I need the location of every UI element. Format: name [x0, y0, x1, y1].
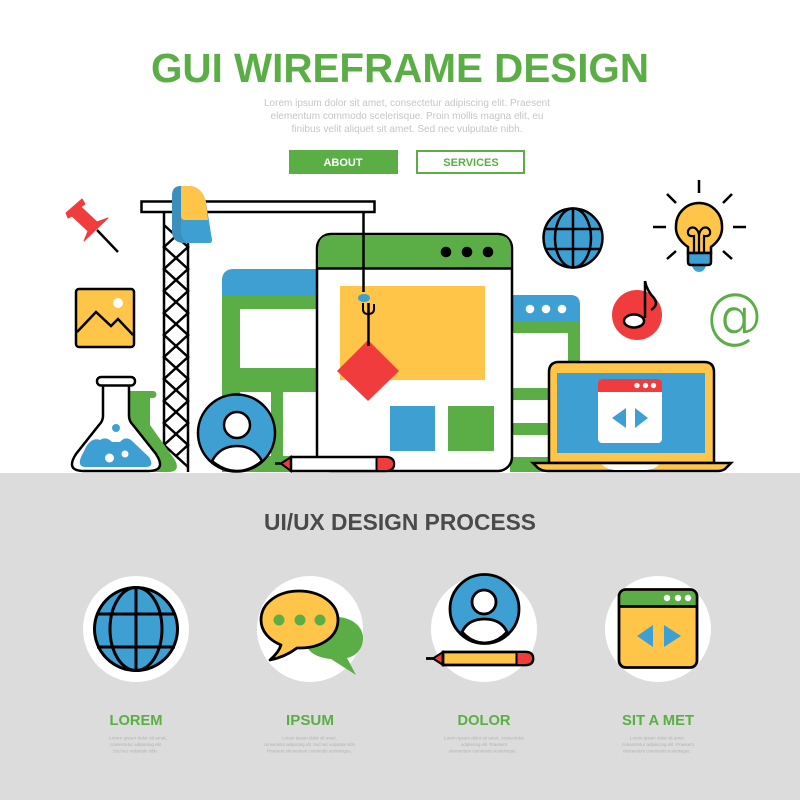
- caption: sit a met: [622, 736, 695, 754]
- intro paragraph: elementum commodo scelerisque. Proin mollis magna elit, eu: [270, 110, 544, 122]
- crane jib: [142, 202, 374, 212]
- icon: music note: [612, 281, 662, 340]
- caption: sit a met: consectetur adipiscing elit. Praesent: [622, 742, 695, 748]
- button: services: [417, 151, 524, 173]
- button: about: [289, 150, 398, 174]
- caption: lorem: consectetur adipiscing elit.: [110, 742, 162, 748]
- caption: lorem: [109, 736, 167, 754]
- caption: lorem: Sed nec vulputate nibh.: [113, 748, 158, 754]
- caption: sit a met: elementum commodo scelerisque.: [623, 748, 691, 754]
- caption: dolor: adipiscing elit. Praesent: [461, 742, 508, 748]
- step 2: ipsum: [257, 576, 363, 754]
- icon: green flask behind: [130, 391, 177, 472]
- icon: image: [76, 289, 134, 347]
- icon: chat bubbles: [257, 576, 363, 682]
- back window left: [222, 269, 320, 472]
- crane hook with red diamond: [337, 212, 399, 401]
- caption: ipsum: Lorem ipsum dolor sit amet,: [282, 736, 337, 742]
- button: about: ABOUT: [323, 157, 363, 169]
- caption: lorem: Lorem ipsum dolor sit amet,: [109, 736, 167, 742]
- icon: at sign: @: [706, 278, 763, 352]
- label: dolor: DOLOR: [458, 712, 511, 729]
- button: services: SERVICES: [443, 157, 499, 169]
- icon: pencil: [275, 457, 394, 471]
- caption: ipsum: [264, 736, 356, 754]
- icon: user avatar: [198, 394, 275, 472]
- intro paragraph: Lorem ipsum dolor sit amet, consectetur adipiscing elit. Praesent: [264, 97, 550, 109]
- section heading: UI/UX DESIGN PROCESS: [264, 509, 536, 535]
- icon: laptop: [533, 362, 731, 471]
- crane cap: [172, 186, 212, 243]
- icon: avatar and pencil: [426, 574, 537, 682]
- icon: globe top: [544, 208, 602, 268]
- caption: dolor: elementum commodo scelerisque.: [449, 748, 517, 754]
- icon: globe: [83, 576, 189, 682]
- label: ipsum: IPSUM: [286, 712, 334, 729]
- caption: sit a met: Lorem ipsum dolor sit amet,: [630, 736, 685, 742]
- step 4: sit a met: [605, 576, 711, 754]
- main browser window: [317, 234, 512, 471]
- label: lorem: LOREM: [110, 712, 162, 729]
- step 3: dolor: [426, 574, 537, 754]
- icon: flask: [72, 377, 160, 471]
- crane tower: [164, 212, 188, 472]
- intro paragraph: finibus velit aliquet sit amet. Sed nec vulputate nibh.: [292, 123, 522, 135]
- back window right: [510, 295, 580, 472]
- caption: ipsum: consectetur adipiscing elit. Sed nec vulputate nibh.: [264, 742, 356, 748]
- bottom grey panel: [0, 473, 800, 800]
- title: GUI WIREFRAME DESIGN: [151, 45, 649, 91]
- label: sit a met: SIT A MET: [622, 712, 694, 729]
- intro paragraph: [264, 97, 550, 135]
- caption: dolor: Lorem ipsum dolor sit amet, consectetur: [444, 736, 524, 742]
- icon: push pin: [66, 199, 118, 252]
- icon: browser window: [605, 576, 711, 682]
- icon: light bulb: [653, 180, 746, 272]
- caption: dolor: [444, 736, 524, 754]
- caption: ipsum: Praesent elementum commodo scelerisque.: [267, 748, 352, 754]
- step 1: lorem: [83, 576, 189, 754]
